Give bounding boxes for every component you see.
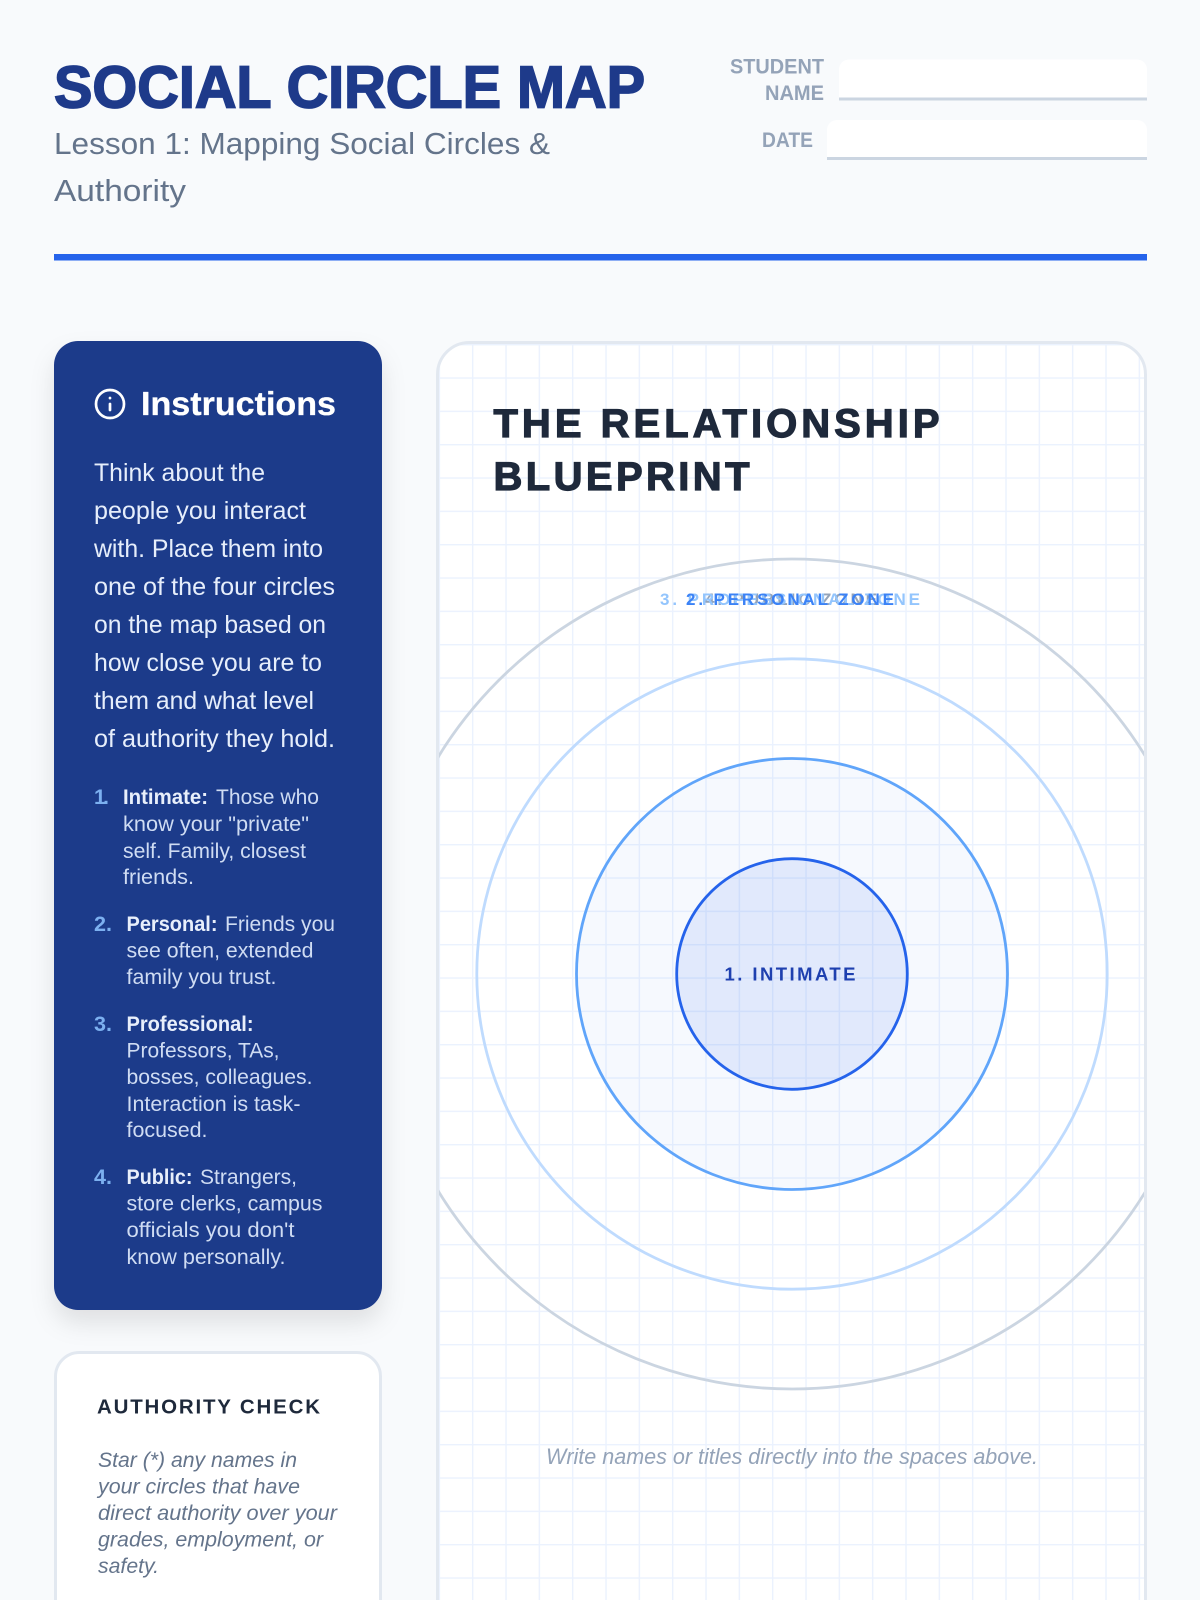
- intro paragraph: Think about the: [94, 459, 265, 487]
- icon: info: [96, 390, 124, 418]
- label: public zone: 4. PUBLIC ZONE: [705, 590, 877, 609]
- intro paragraph: [93, 459, 335, 753]
- list item 3: professional: Professional:: [126, 1013, 254, 1036]
- label: personal zone: 2. PERSONAL ZONE: [686, 590, 894, 609]
- list item 1: intimate: self. Family, closest: [123, 840, 306, 863]
- subtitle: [54, 127, 550, 208]
- list item 2: personal: family you trust.: [126, 966, 276, 989]
- circle: intimate zone: [677, 859, 907, 1089]
- student name field: [730, 56, 1147, 105]
- list item 3: professional: focused.: [126, 1119, 208, 1142]
- date field: [762, 120, 1147, 160]
- title: SOCIAL CIRCLE MAP: [54, 54, 645, 120]
- list item 2: personal: 2.: [94, 913, 112, 936]
- circle: public zone: [439, 558, 1144, 1390]
- list item 4: public: [94, 1166, 322, 1269]
- intro paragraph: one of the four circles: [94, 573, 335, 601]
- authority note: direct authority over your: [98, 1502, 338, 1525]
- list item 2: personal: Friends you: [225, 913, 335, 936]
- list item 4: public: Public:: [126, 1166, 192, 1189]
- student name field: NAME: [765, 82, 824, 105]
- list item 2: personal: [94, 913, 335, 989]
- list item 4: public: store clerks, campus: [126, 1192, 322, 1216]
- circle: professional zone: [477, 659, 1107, 1289]
- header: [54, 54, 1147, 260]
- student name field: STUDENT: [730, 56, 824, 78]
- list item 3: professional: [94, 1013, 312, 1142]
- intro paragraph: on the map based on: [94, 611, 326, 639]
- footnote: Write names or titles directly into the spaces above.: [546, 1444, 1038, 1469]
- authority note: [96, 1449, 338, 1578]
- heading: authority check: AUTHORITY CHECK: [97, 1396, 320, 1418]
- list item 3: professional: Professors, TAs,: [126, 1040, 280, 1062]
- heading: instructions: Instructions: [141, 385, 336, 422]
- list item 3: professional: bosses, colleagues.: [126, 1066, 312, 1089]
- list item 1: intimate: know your "private": [123, 813, 309, 836]
- intro paragraph: of authority they hold.: [94, 725, 335, 753]
- authority note: Star (*) any names in: [98, 1449, 297, 1472]
- list item 4: public: 4.: [94, 1166, 112, 1189]
- list item 4: public: Strangers,: [200, 1166, 297, 1189]
- list item 4: public: officials you don't: [126, 1219, 295, 1242]
- intro paragraph: how close you are to: [94, 649, 322, 677]
- intro paragraph: people you interact: [94, 497, 306, 525]
- heading: the relationship blueprint: [494, 402, 940, 499]
- list item 1: intimate: friends.: [123, 866, 194, 889]
- list item 1: intimate: [94, 786, 319, 889]
- date field: DATE: [762, 129, 813, 152]
- circle: personal zone: [576, 758, 1008, 1190]
- panel: relationship blueprint: [436, 341, 1147, 1600]
- authority note: safety.: [98, 1555, 159, 1578]
- subtitle: Lesson 1: Mapping Social Circles &: [54, 127, 550, 161]
- list item 4: public: know personally.: [126, 1246, 286, 1269]
- intro paragraph: with. Place them into: [93, 535, 323, 563]
- intro paragraph: them and what level: [94, 687, 314, 715]
- authority note: your circles that have: [96, 1476, 300, 1498]
- heading: the relationship blueprint: BLUEPRINT: [494, 455, 750, 499]
- concentric circle map: [439, 558, 1144, 1390]
- list item 1: intimate: Those who: [216, 786, 319, 809]
- list item 1: intimate: Intimate:: [123, 786, 208, 809]
- list item 2: personal: Personal:: [126, 913, 218, 936]
- label: professional zone: 3. PROFESSIONAL ZONE: [660, 590, 920, 609]
- label: intimate: 1. INTIMATE: [724, 964, 856, 984]
- subtitle: Authority: [54, 174, 187, 208]
- list item 2: personal: see often, extended: [126, 940, 314, 962]
- heading: the relationship blueprint: THE RELATIONSHIP: [494, 402, 940, 446]
- authority note: grades, employment, or: [98, 1528, 324, 1552]
- list item 1: intimate: 1.: [94, 786, 109, 809]
- list item 3: professional: 3.: [94, 1013, 112, 1036]
- panel: authority check: [56, 1352, 380, 1600]
- header rule: [54, 254, 1147, 260]
- panel: instructions: [54, 341, 382, 1310]
- list item 3: professional: Interaction is task-: [126, 1093, 300, 1116]
